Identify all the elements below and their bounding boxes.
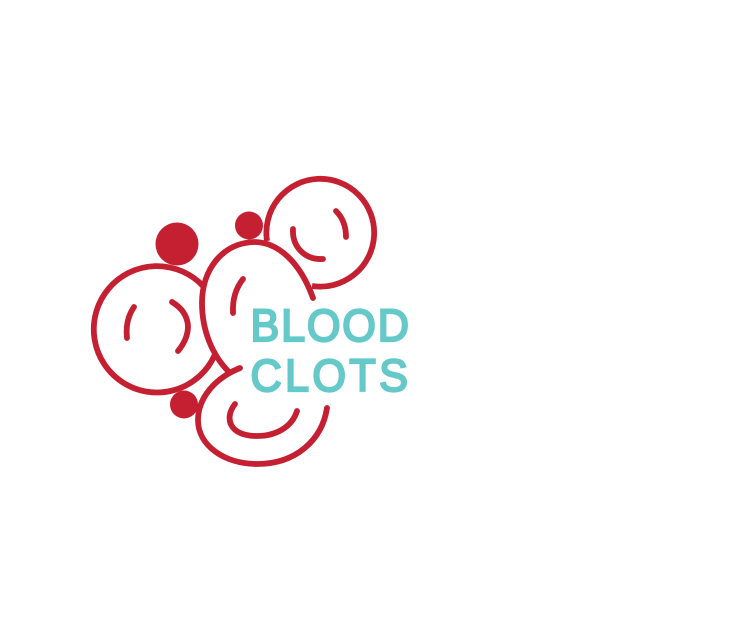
title line: BLOOD: BLOOD: [250, 301, 409, 351]
title: BLOOD CLOTS: [250, 301, 409, 401]
icon: platelet large: [156, 222, 198, 266]
icon: top right round cell: [266, 179, 374, 287]
icon: blood cells illustration: [94, 179, 374, 464]
icon: middle cell: [202, 242, 313, 372]
icon: platelet top: [235, 212, 263, 240]
icon: bottom cell: [198, 368, 327, 464]
icon: left round cell: [94, 266, 214, 392]
icon: platelet bottom: [170, 390, 198, 418]
title line: CLOTS: CLOTS: [250, 351, 408, 401]
